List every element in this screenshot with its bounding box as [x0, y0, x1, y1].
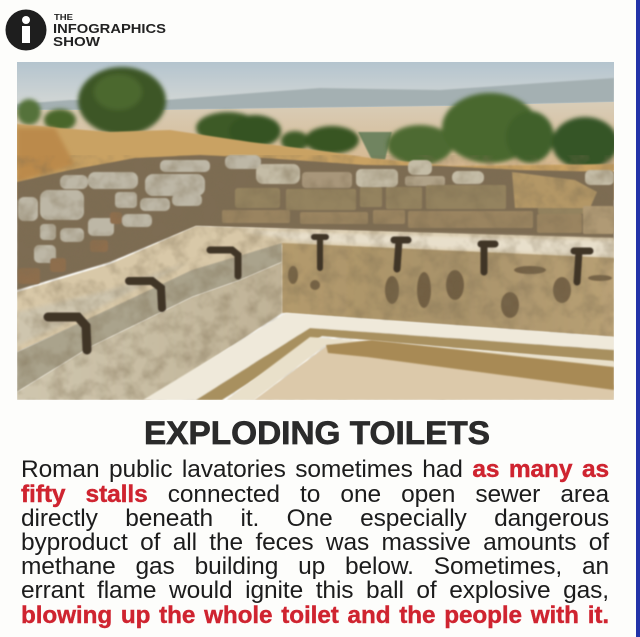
logo wordmark: INFOGRAPHICS: [53, 21, 166, 36]
body text: methane gas building up below. Sometimes, an: [21, 553, 609, 580]
right edge strip: [636, 0, 640, 637]
seat face, right: [282, 243, 614, 337]
distant mountains: [17, 78, 614, 110]
seating platform top: [17, 226, 614, 352]
seat front edge, left: [17, 243, 282, 392]
sky: [17, 62, 614, 112]
body text: byproduct of all the feces was massive amounts of: [21, 529, 609, 556]
icon: info circle: [6, 10, 46, 50]
seat face, left: [17, 262, 282, 400]
title: EXPLODING TOILETS: [144, 415, 490, 451]
dry grass: [17, 124, 614, 200]
body text: errant flame would ignite this ball of explosive gas,: [21, 577, 609, 604]
lichen stains: [288, 266, 612, 318]
green field: [358, 132, 392, 160]
body text: fifty stalls connected to one open sewer area: [21, 481, 609, 508]
logo: [6, 10, 166, 50]
logo wordmark: SHOW: [53, 34, 101, 49]
second white step: [226, 337, 614, 400]
plain: [17, 102, 614, 170]
brown band: [196, 328, 614, 400]
body text: blowing up the whole toilet and the people with it.: [21, 602, 609, 629]
white curb: [143, 313, 614, 400]
photo: ruins of Roman latrine: [17, 62, 614, 400]
body text: directly beneath it. One especially dangerous: [21, 505, 609, 532]
stone texture: [17, 155, 614, 400]
sunken floor: [254, 345, 614, 400]
body text: [21, 456, 610, 629]
wall stones: [18, 155, 261, 263]
logo wordmark: THE: [54, 12, 73, 22]
latrine keyholes: [48, 237, 590, 350]
logo wordmark: [53, 12, 166, 49]
trees: [17, 67, 618, 169]
body text: Roman public lavatories sometimes had as many as: [21, 456, 609, 483]
lower brown step: [326, 340, 614, 390]
stone wall: [17, 155, 614, 290]
